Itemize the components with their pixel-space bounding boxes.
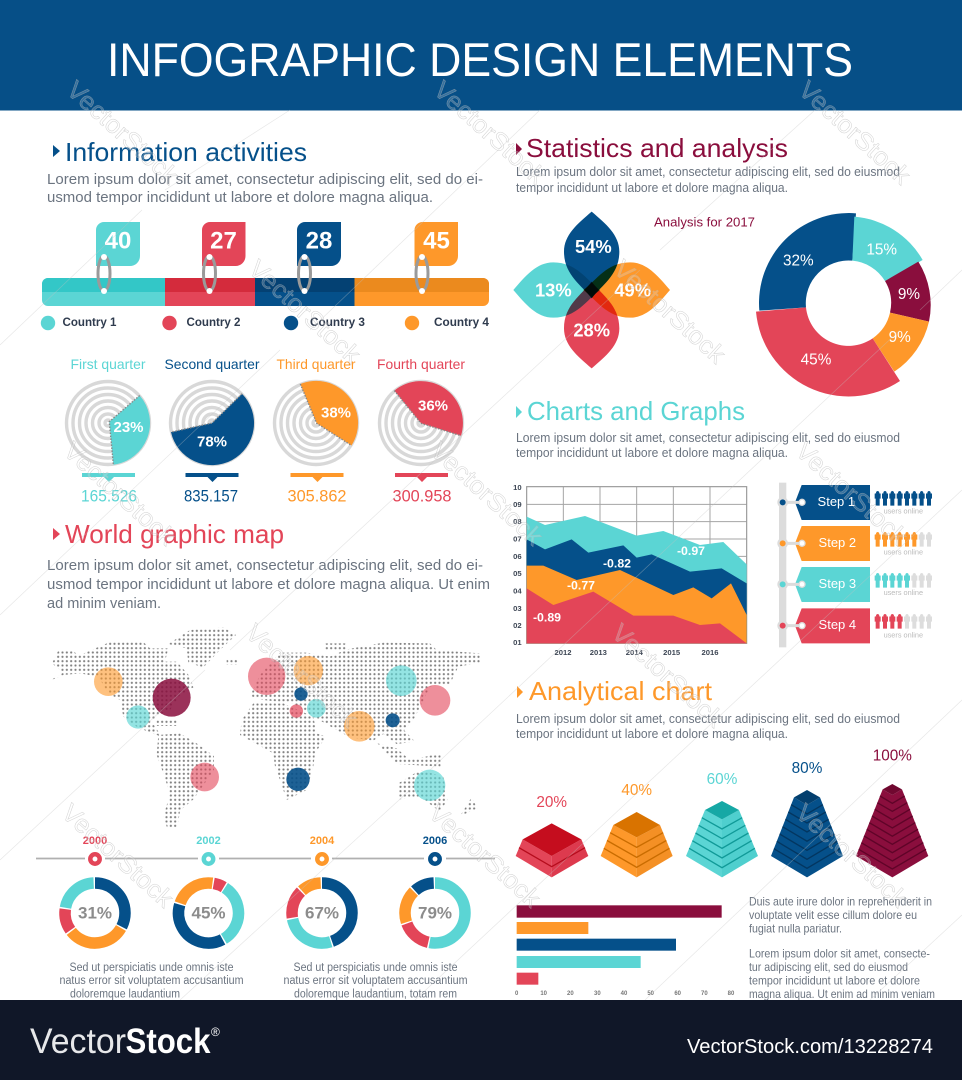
timeline: 2002: [196, 835, 221, 847]
big donut chart: 45%: [801, 351, 832, 368]
pyramid 40%: [601, 782, 673, 877]
charts intro text: [516, 431, 900, 460]
segmented bar: [42, 278, 489, 306]
footer url: VectorStock.com/13228274: [687, 1036, 933, 1058]
side text block 2: tempor incididunt ut labore et dolore: [749, 974, 920, 988]
step 2: Step 2: [819, 535, 856, 550]
pyramid 20%: [516, 794, 588, 877]
timeline: 2006: [423, 835, 447, 847]
timeline: 2000: [83, 835, 107, 847]
big donut chart: 9%: [898, 286, 920, 303]
legend: [41, 315, 489, 330]
watermark overlay: VectorStock: [423, 799, 546, 913]
step 1: [777, 485, 932, 520]
area chart: 2012: [554, 648, 572, 657]
subheading: analysis for 2017: Analysis for 2017: [654, 214, 755, 230]
watermark overlay: VectorStock: [61, 76, 184, 190]
area chart: 2013: [590, 648, 607, 657]
dotted world map: [50, 627, 480, 828]
quarter chart 4: [377, 356, 465, 506]
timeline: [36, 835, 495, 864]
horizontal bar chart: 80: [728, 991, 735, 997]
step 4: Step 4: [819, 617, 856, 632]
analytical intro text: Lorem ipsum dolor sit amet, consectetur adipiscing elit, sed do eiusmod: [516, 712, 900, 726]
horizontal bar chart: 50: [647, 991, 655, 997]
area chart: 01: [513, 638, 522, 647]
step 2: users online: [884, 547, 923, 556]
watermark overlay: VectorStock: [243, 255, 366, 369]
pyramid 100%: [856, 747, 928, 877]
side text block 2: [749, 946, 935, 1001]
quarter chart 3: 305.862: [288, 486, 346, 506]
caption left: Sed ut perspiciatis unde omnis iste: [70, 962, 234, 974]
tag 28: 28: [306, 228, 332, 254]
map intro text: Lorem ipsum dolor sit amet, consectetur adipiscing elit, sed do ei-: [47, 558, 483, 574]
area chart: 09: [513, 500, 522, 509]
pyramid 100%: 100%: [873, 747, 912, 764]
footer logo: ®: [211, 1025, 220, 1039]
step 4: [777, 608, 932, 643]
charts intro text: Lorem ipsum dolor sit amet, consectetur adipiscing elit, sed do eiusmod: [516, 431, 900, 445]
quarter chart 3: Third quarter: [276, 356, 356, 372]
quarter chart 2: Second quarter: [164, 356, 260, 372]
step list: [777, 483, 932, 647]
header banner: [0, 0, 962, 110]
analytical intro text: tempor incididunt ut labore et dolore magna aliqua.: [516, 727, 788, 741]
area chart: 03: [513, 604, 522, 613]
quarter chart 1: 23%: [113, 419, 144, 436]
step 2: [777, 526, 932, 561]
legend: Country 2: [186, 315, 241, 329]
pyramid 60%: [686, 771, 758, 877]
area chart: 04: [513, 586, 522, 595]
map intro text: [47, 558, 490, 612]
intro text: usmod tempor incididunt ut labore et dolore magna aliqua.: [47, 190, 433, 206]
pyramid 60%: 60%: [707, 771, 738, 788]
footer logo: [30, 1022, 220, 1061]
area chart: 2016: [701, 648, 719, 657]
tag 27: [202, 222, 246, 294]
donut 2000: 31%: [78, 904, 112, 922]
panel: world graphic map: [36, 519, 495, 1000]
quarter chart 4: 36%: [418, 398, 448, 414]
charts intro text: tempor incididunt ut labore et dolore magna aliqua.: [516, 446, 788, 460]
step 3: users online: [884, 588, 923, 597]
side text block 2: Lorem ipsum dolor sit amet, consecte-: [749, 946, 930, 960]
big donut chart: 15%: [866, 241, 897, 258]
caption right: doloremque laudantium, totam rem: [294, 988, 457, 1000]
pyramid 80%: [771, 760, 843, 877]
horizontal bar chart: 10: [540, 991, 548, 997]
big donut chart: 32%: [783, 252, 814, 269]
footer logo: Vector: [30, 1022, 126, 1061]
tag 45: 45: [423, 228, 450, 254]
quarter chart 3: 38%: [321, 404, 351, 422]
area chart: 06: [513, 552, 522, 561]
donut 2002: [167, 872, 250, 954]
flower chart: 49%: [614, 279, 651, 300]
quarter chart 1: First quarter: [70, 356, 146, 372]
watermark overlay: VectorStock: [606, 619, 729, 733]
quarter chart 1: 165.526: [81, 486, 137, 506]
horizontal bar chart: 40: [621, 991, 628, 997]
tag 27: 27: [210, 228, 237, 254]
watermark overlay: VectorStock: [425, 437, 548, 551]
side text block 2: tur adipiscing elit, sed do eiusmod: [749, 960, 908, 974]
watermark overlay: VectorStock: [58, 437, 181, 551]
area chart: 10: [513, 483, 522, 492]
side text block 1: Duis aute irure dolor in reprehenderit in: [749, 894, 932, 908]
donut 2006: 79%: [418, 904, 452, 922]
heading: information activities: Information activities: [65, 137, 307, 167]
area chart: 08: [513, 517, 522, 526]
flower chart: [513, 212, 670, 368]
caption left: natus error sit voluptatem accusantium: [60, 975, 244, 987]
donut 2006: [393, 871, 477, 955]
map intro text: ad minim veniam.: [47, 596, 161, 612]
legend: Country 4: [434, 315, 489, 329]
step 1: Step 1: [818, 494, 855, 509]
panel: charts and graphs: [513, 396, 932, 657]
watermark overlay: VectorStock: [790, 799, 913, 913]
watermark overlay: VectorStock: [428, 76, 551, 190]
analytical intro text: [516, 712, 900, 741]
statistics intro text: tempor incididunt ut labore et dolore magna aliqua.: [516, 181, 788, 195]
area chart: -0.77: [567, 579, 595, 593]
step 3: [777, 567, 932, 602]
step 1: users online: [884, 506, 923, 515]
side text block 2: magna aliqua. Ut enim ad minim veniam: [749, 987, 935, 1001]
statistics intro text: [516, 165, 900, 195]
caption left: [60, 962, 244, 1000]
heading: charts and graphs: Charts and Graphs: [527, 396, 745, 426]
watermark overlay: VectorStock: [56, 799, 179, 913]
caption right: natus error sit voluptatem accusantium: [284, 975, 468, 987]
area chart: [513, 483, 747, 657]
heading: analytical chart: Analytical chart: [529, 676, 713, 706]
panel: analytical chart: [515, 676, 935, 1001]
tag 40: [96, 222, 140, 294]
donut 2004: 67%: [305, 904, 339, 922]
legend: Country 3: [310, 315, 365, 329]
flower chart: 28%: [573, 319, 610, 340]
side text block 1: [749, 894, 932, 936]
tag 45: [414, 222, 458, 294]
step 4: users online: [884, 630, 923, 639]
big donut chart: 9%: [889, 329, 911, 346]
area chart: 02: [513, 621, 522, 630]
heading: statistics and analysis: Statistics and analysis: [526, 133, 788, 163]
watermark overlay: VectorStock: [793, 76, 916, 190]
quarter chart 1: [66, 356, 150, 506]
area chart: -0.82: [603, 557, 631, 571]
panel: information activities: [41, 137, 489, 506]
watermark overlay: VectorStock: [608, 255, 731, 369]
area chart: -0.89: [533, 611, 561, 625]
title: INFOGRAPHIC DESIGN ELEMENTS: [107, 33, 853, 86]
donut 2002: 45%: [191, 904, 226, 922]
quarter chart 2: [164, 356, 260, 506]
horizontal bar chart: 20: [567, 991, 574, 997]
horizontal bar chart: 0: [515, 991, 519, 997]
quarter chart 4: Fourth quarter: [377, 356, 465, 372]
quarter chart 2: 835.157: [184, 486, 238, 506]
area chart: -0.97: [677, 544, 705, 558]
watermark overlay: VectorStock: [790, 437, 913, 551]
tag 28: [297, 222, 341, 294]
big donut chart: [756, 213, 931, 396]
side text block 1: fugiat nulla pariatur.: [749, 922, 842, 936]
quarter chart 3: [274, 356, 358, 506]
map intro text: usmod tempor incididunt ut labore et dolore magna aliqua. Ut enim: [47, 577, 490, 593]
caption right: Sed ut perspiciatis unde omnis iste: [294, 962, 458, 974]
horizontal bar chart: 30: [594, 991, 601, 997]
timeline: 2004: [310, 835, 335, 847]
caption right: [284, 962, 468, 1000]
pyramid 80%: 80%: [792, 760, 823, 777]
quarter chart 4: 300.958: [392, 486, 452, 506]
map bubbles: [94, 656, 450, 801]
pyramid 20%: 20%: [536, 794, 567, 811]
area chart: 05: [513, 569, 522, 578]
heading: world graphic map: World graphic map: [65, 519, 284, 549]
side text block 1: voluptate velit esse cillum dolore eu: [749, 908, 917, 922]
legend: Country 1: [62, 315, 117, 329]
flower chart: 54%: [575, 236, 612, 257]
footer band: [0, 1000, 962, 1080]
horizontal bar chart: 60: [674, 991, 682, 997]
intro text: [47, 172, 483, 206]
area chart: 2014: [626, 648, 644, 657]
donut 2004: [280, 871, 364, 955]
intro text: Lorem ipsum dolor sit amet, consectetur adipiscing elit, sed do ei-: [47, 172, 483, 188]
donut 2000: [53, 871, 137, 955]
quarter chart 2: 78%: [197, 434, 227, 450]
horizontal bar chart: [515, 905, 735, 997]
area chart: 2015: [663, 648, 681, 657]
step 3: Step 3: [819, 576, 856, 591]
watermark overlay: VectorStock: [240, 619, 363, 733]
caption left: doloremque laudantium: [70, 988, 180, 1000]
area chart: 07: [513, 534, 522, 543]
pyramid charts: [516, 747, 928, 877]
statistics intro text: Lorem ipsum dolor sit amet, consectetur adipiscing elit, sed do eiusmod: [516, 165, 900, 179]
pyramid 40%: 40%: [621, 782, 652, 799]
panel: statistics and analysis: [513, 133, 931, 396]
horizontal bar chart: 70: [701, 991, 708, 997]
footer logo: Stock: [126, 1022, 211, 1061]
tag 40: 40: [105, 228, 131, 254]
flower chart: 13%: [535, 279, 572, 300]
